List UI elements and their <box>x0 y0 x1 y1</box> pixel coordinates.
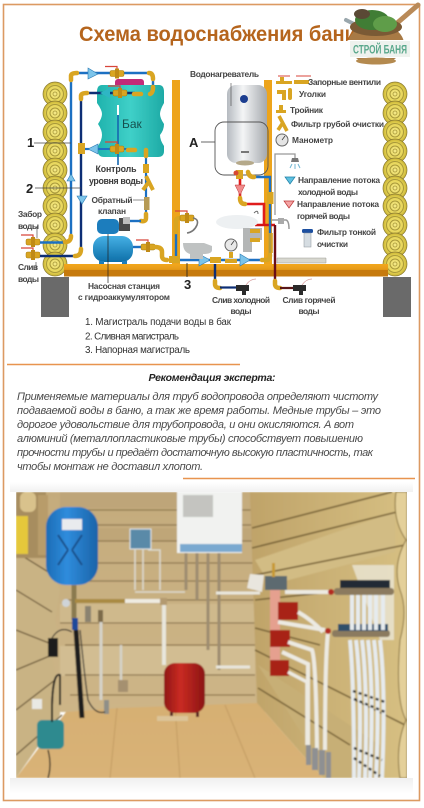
right partition post <box>264 80 272 264</box>
tank label: Бак <box>122 117 143 131</box>
underfloor pipes <box>350 595 384 778</box>
expert recommendation text: Применяемые материалы для труб водопровода определяют чистоту <box>17 391 380 403</box>
legend: shut-off valves: Запорные вентили <box>308 77 381 87</box>
list of mains: 3. Напорная магистраль <box>85 345 190 356</box>
blue expansion tank <box>46 507 98 585</box>
water tank <box>97 79 164 165</box>
wall socket and black box <box>32 630 72 709</box>
legend: tee: Тройник <box>290 105 324 115</box>
logo: Строй Баня <box>346 5 418 64</box>
pressure gauge on line <box>225 239 237 251</box>
expert recommendation text: алюминий (металлопластиковые трубы) способствует повышению <box>17 433 363 445</box>
expert recommendation heading: Рекомендация эксперта: <box>148 372 276 384</box>
red expansion tank <box>157 663 205 721</box>
cold water piping to heater <box>215 172 274 288</box>
legend: shut-off valves <box>276 76 381 87</box>
expert recommendation text: чтобы монтаж не доставил хлопот. <box>17 461 203 473</box>
white pipes to left from boiler <box>216 593 260 667</box>
photo shadow <box>10 482 413 794</box>
pressure main 3 <box>133 211 268 266</box>
callout 3 <box>184 263 191 292</box>
left log wall <box>43 82 67 276</box>
label: water intake <box>18 209 42 231</box>
right foundation <box>383 277 411 317</box>
legend: cold flow direction: Направление потока <box>298 175 380 185</box>
floor <box>16 703 323 778</box>
marker A: A <box>189 135 199 150</box>
callout 2 <box>26 181 81 196</box>
right log wall <box>383 82 407 276</box>
legend: hot flow direction: горячей воды <box>297 211 350 221</box>
bench on floor <box>277 258 326 263</box>
outline A <box>215 122 268 175</box>
left partition post <box>172 80 180 264</box>
label: check valve: клапан <box>98 206 126 216</box>
water heater <box>227 83 267 166</box>
legend: fine filter: Фильтр тонкой <box>317 227 376 237</box>
right edge log ends <box>395 492 407 778</box>
legend: fine filter <box>302 227 376 249</box>
list of mains: 1. Магистраль подачи воды в бак <box>85 317 232 328</box>
pipe sleeves <box>306 745 331 778</box>
callout 2: 2 <box>26 181 33 196</box>
intake and drain valves at wall <box>21 226 81 270</box>
label: water intake: Забор <box>18 209 42 219</box>
supply main 1 <box>67 66 153 237</box>
label: water intake: воды <box>18 221 39 231</box>
label: hot drain <box>282 295 336 316</box>
legend: hot flow direction: Направление потока <box>297 199 379 209</box>
drain main 2 <box>77 86 141 250</box>
upper divider <box>7 364 240 366</box>
label: check valve <box>92 195 144 216</box>
label: hot drain: воды <box>298 306 320 316</box>
legend: fine filter: очистки <box>317 239 348 249</box>
list of mains: 2. Сливная магистраль <box>85 332 179 342</box>
callout 1 <box>27 135 71 150</box>
legend: coarse filter: Фильтр грубой очистки <box>291 119 384 129</box>
label: hot drain: Слив горячей <box>282 295 336 305</box>
marker A <box>189 135 215 150</box>
callout 1: 1 <box>27 135 34 150</box>
legend: elbows <box>277 89 326 100</box>
legend: cold flow direction <box>285 175 380 197</box>
label: pump station: с гидроаккумулятором <box>78 292 170 302</box>
blue tank fittings and brass line <box>62 585 167 714</box>
label: cold drain: воды <box>230 306 252 316</box>
hot water piping <box>234 170 294 288</box>
legend: cold flow direction: холодной воды <box>298 187 358 197</box>
list of mains <box>85 317 232 356</box>
control box <box>130 529 185 592</box>
toilet <box>183 243 212 259</box>
drain taps <box>236 279 312 295</box>
legend: pressure gauge: Манометр <box>292 135 333 145</box>
legend: tee <box>276 105 324 115</box>
floor <box>64 264 388 276</box>
label: level control: Контроль <box>96 164 137 174</box>
expert recommendation text: дорогое удовольствие для трубопровода, и они окисляются. А вот <box>17 419 354 431</box>
lower divider <box>183 478 415 480</box>
green pump <box>37 675 64 778</box>
pipe clips <box>353 691 385 776</box>
right wall <box>250 492 407 778</box>
legend: pressure gauge <box>276 134 333 146</box>
label: level control <box>89 164 143 186</box>
label: cold drain <box>212 295 270 316</box>
back wall <box>16 492 266 712</box>
label: water drain: воды <box>18 274 39 284</box>
sink and faucet <box>216 211 289 252</box>
black hose <box>72 618 105 718</box>
label: level control: уровня воды <box>89 176 143 186</box>
label: cold drain: Слив холодной <box>212 295 270 305</box>
legend: elbows: Уголки <box>299 89 326 99</box>
expert recommendation text: прочности трубы и предаёт достаточную высокую пластичность, так <box>17 447 374 459</box>
window <box>16 492 48 558</box>
water supply diagram <box>18 66 411 317</box>
shower <box>275 154 300 215</box>
white heating pipes <box>278 592 330 750</box>
label: pump station: Насосная станция <box>88 281 160 291</box>
heating pump group <box>247 563 298 676</box>
expert recommendation text <box>17 391 381 473</box>
label: water drain: Слив <box>18 262 38 272</box>
pumping station <box>93 217 133 283</box>
expert recommendation text: подаваемой воды в баню, а так же время работы. Медные трубы – это <box>17 405 381 417</box>
riser with check valve and coarse filter <box>130 150 153 221</box>
label: water drain <box>18 262 39 284</box>
title: Схема водоснабжения бани <box>79 23 357 46</box>
label: check valve: Обратный <box>92 195 132 205</box>
left wall logs <box>16 552 62 778</box>
photo: boiler room <box>16 492 407 778</box>
legend: coarse filter <box>278 116 384 131</box>
label: water heater: Водонагреватель <box>190 69 259 79</box>
label: pump station <box>78 281 170 302</box>
underfloor manifolds <box>325 565 394 640</box>
wall boiler <box>177 492 242 670</box>
left foundation <box>41 277 69 317</box>
legend: hot flow direction <box>284 199 379 221</box>
callout 3: 3 <box>184 277 191 292</box>
